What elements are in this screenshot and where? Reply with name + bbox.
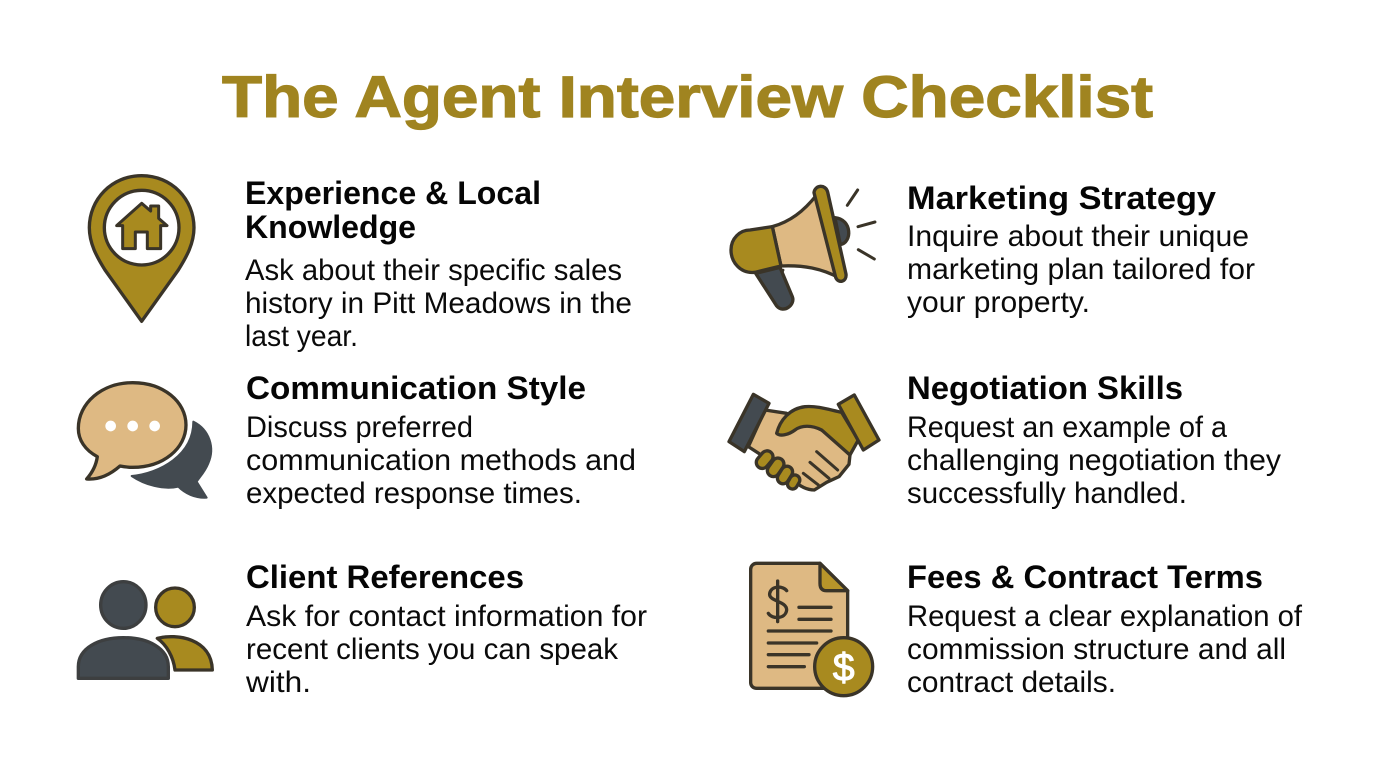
text: fees description: commission structure and all bbox=[907, 633, 1286, 666]
item: negotiation skills bbox=[907, 370, 1281, 510]
text: experience description bbox=[245, 254, 632, 353]
item: marketing strategy bbox=[907, 180, 1255, 319]
item: client references bbox=[245, 559, 647, 699]
title: The Agent Interview Checklist bbox=[222, 65, 1153, 130]
icon: two people bbox=[78, 582, 212, 678]
text: fees description: contract details. bbox=[907, 666, 1116, 699]
icon: speech bubbles bbox=[78, 383, 211, 498]
text: experience description: Ask about their specific sales bbox=[245, 254, 622, 287]
text: marketing description: Inquire about their unique bbox=[907, 220, 1249, 253]
text: experience description: last year. bbox=[245, 320, 358, 353]
text: negotiation description: challenging negotiation they bbox=[907, 444, 1281, 477]
text: negotiation description bbox=[907, 411, 1281, 510]
icon: fee document with dollar coin bbox=[751, 563, 873, 696]
text: fees description: Request a clear explanation of bbox=[907, 600, 1303, 633]
icon: handshake bbox=[729, 394, 879, 491]
heading: negotiation: Negotiation Skills bbox=[907, 370, 1183, 406]
text: negotiation description: successfully handled. bbox=[907, 477, 1187, 510]
text: communication description: Discuss preferred bbox=[246, 411, 473, 444]
text: client references description bbox=[245, 600, 647, 699]
text: communication description: expected response times. bbox=[246, 477, 582, 510]
icon: fee document with dollar coin: $ bbox=[833, 646, 855, 690]
heading: fees: Fees & Contract Terms bbox=[907, 559, 1263, 595]
text: client references description: recent clients you can speak bbox=[246, 633, 618, 666]
item: experience and local knowledge bbox=[245, 175, 632, 353]
icon: megaphone bbox=[731, 186, 875, 309]
text: marketing description: your property. bbox=[907, 286, 1090, 319]
text: marketing description: marketing plan tailored for bbox=[907, 253, 1255, 286]
heading: experience: Knowledge bbox=[245, 209, 416, 245]
text: marketing description bbox=[907, 220, 1255, 319]
heading: client references: Client References bbox=[246, 559, 524, 595]
text: communication description bbox=[246, 411, 636, 510]
item: communication style bbox=[246, 370, 636, 510]
heading: experience bbox=[245, 175, 541, 245]
text: client references description: Ask for contact information for bbox=[246, 600, 647, 633]
text: negotiation description: Request an example of a bbox=[907, 411, 1228, 444]
heading: communication: Communication Style bbox=[246, 370, 586, 406]
heading: marketing: Marketing Strategy bbox=[907, 180, 1216, 216]
heading: experience: Experience & Local bbox=[245, 175, 541, 211]
text: client references description: with. bbox=[245, 666, 311, 699]
text: communication description: communication methods and bbox=[246, 444, 636, 477]
icon: location pin with house bbox=[89, 176, 194, 321]
item: fees and contract terms bbox=[907, 559, 1303, 699]
text: fees description bbox=[907, 600, 1303, 699]
text: experience description: history in Pitt Meadows in the bbox=[245, 287, 632, 320]
